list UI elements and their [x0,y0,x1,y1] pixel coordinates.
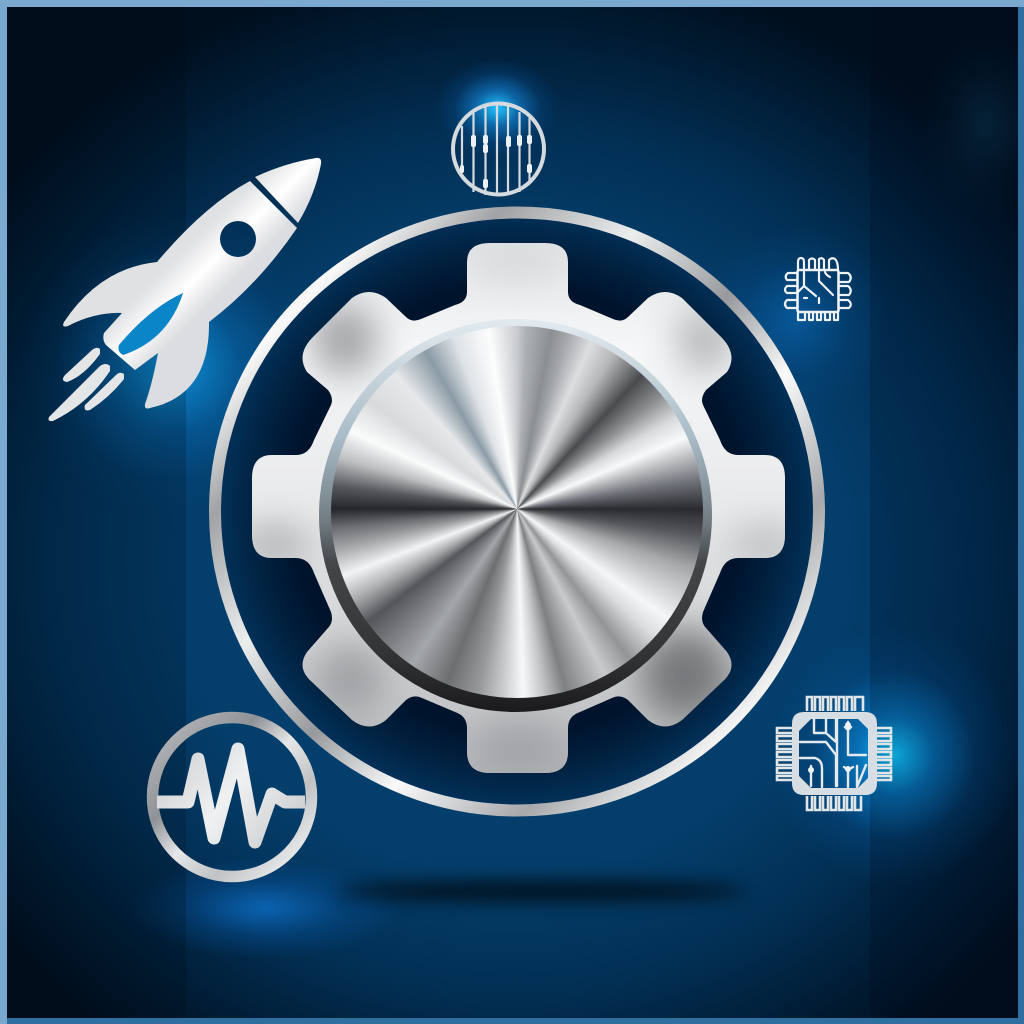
gear body [252,243,785,773]
chip trace nodes [808,722,851,773]
icon: rocket [48,158,321,421]
icon: small circuit chip [785,258,851,320]
chip traces [800,719,866,787]
gear tooth shading [239,246,801,780]
rocket body [63,181,297,408]
ground shadow [335,881,745,901]
waveform line [157,749,305,842]
outer silver ring [215,212,819,810]
metallic disc [331,326,703,698]
rocket nose [255,158,321,223]
waveform ring [152,718,312,876]
chip pins [777,697,891,810]
icon: waveform circle [152,718,312,876]
left dark panel [0,0,186,1024]
chip body [792,712,877,795]
right dark panel [870,0,1024,1024]
rocket flames [48,348,124,421]
ring interior [219,216,815,806]
rocket exhaust slit glow [118,293,183,355]
gear [239,243,801,780]
disc bezel [319,319,712,712]
icon: sliders circle [453,104,544,196]
icon: large circuit chip [777,697,891,810]
